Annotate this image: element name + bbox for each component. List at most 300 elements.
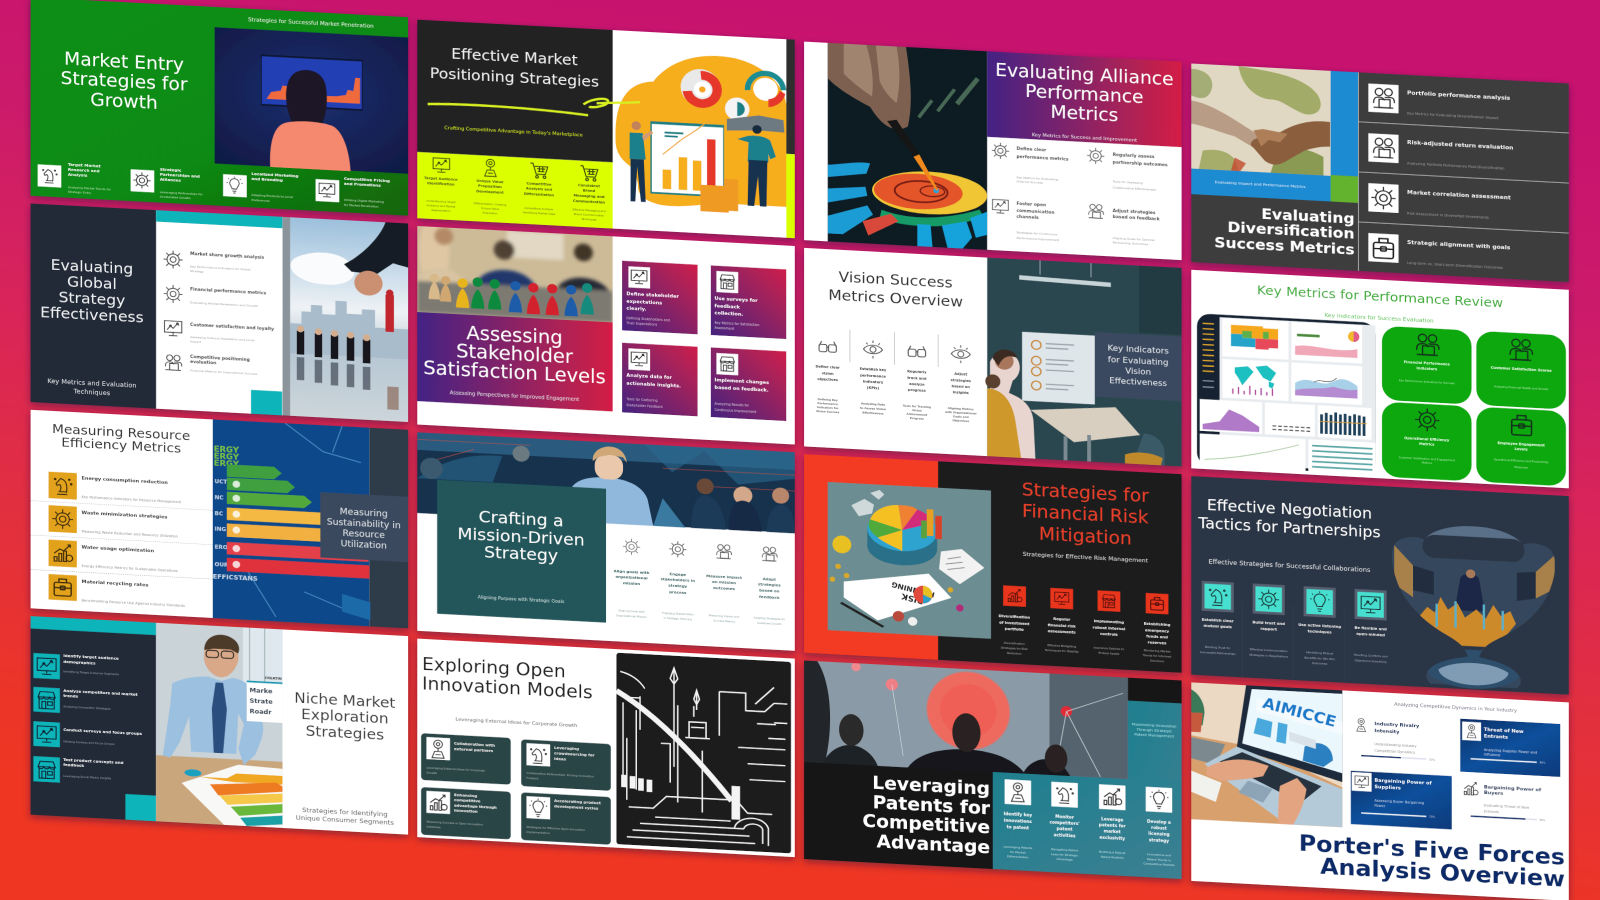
row: four mission items: on mission: [712, 579, 736, 585]
row: four risk actions: [999, 585, 1172, 663]
row: four items: Proposition: [482, 211, 498, 215]
panel: title block: Strategy: [484, 542, 558, 565]
card: financial performance indicators: Key Performance Indicators for Success: [1399, 378, 1455, 385]
card: bargaining power of suppliers: Bargaining Power of: [1374, 778, 1433, 787]
row: four steps: Goals and: [953, 414, 969, 419]
card: bargaining power of suppliers: Suppliers: [1374, 784, 1401, 792]
card: threat of new entrants: Influence: [1484, 752, 1500, 757]
row: four risk actions: Diversification: [1004, 641, 1025, 646]
row: four risk actions: Effective Budgeting: [1047, 643, 1076, 649]
slide: Market Entry Strategies for Growth: [31, 0, 408, 216]
card: use surveys: [711, 265, 786, 339]
subtitle: Key Metrics and Evaluation: [47, 377, 137, 390]
card: bargaining power of suppliers: Assessing Buyer Bargaining: [1374, 799, 1424, 805]
slide: Evaluating Global Strategy Effectiveness: [31, 204, 408, 422]
row: four strategies: Alliances: [160, 177, 181, 183]
card: analyze data: Analyze data for: [626, 373, 673, 381]
row: four negotiation tactics: Outcomes: [1312, 661, 1328, 666]
subtitle: Through Strategic: [1135, 727, 1172, 733]
row: four steps: Analyzing Data: [861, 402, 885, 407]
caption: Evaluating Impact and Performance Metrics: [1215, 180, 1306, 189]
row: four negotiation tactics: Identifying Mutual: [1306, 650, 1333, 656]
row: four steps: vision: [822, 371, 834, 376]
row: four patent actions: for Market: [1010, 850, 1026, 855]
row: four negotiation tactics: Benefits for Win-Win: [1304, 656, 1335, 661]
card: define expectations: expectations: [626, 299, 662, 307]
heading: slide title: Tactics for Partnerships: [1197, 515, 1381, 542]
row: four risk actions: Trends for Informed: [1142, 653, 1172, 659]
row: four patent actions: Competitive Markets: [1143, 862, 1175, 867]
row: four patent actions: Monitor: [1055, 814, 1075, 820]
row: four patent actions: Building a Robust: [1099, 850, 1126, 855]
list: four metrics: [164, 250, 274, 377]
list: four metrics: evaluation: [190, 359, 216, 366]
row: four items: Communication: [573, 199, 606, 204]
row: four steps: Performance: [817, 401, 838, 406]
heading: slide title: Vision Success: [839, 268, 953, 291]
row: four patent actions: Innovations and: [1147, 852, 1171, 857]
row: four items: Analysis and: [526, 187, 553, 192]
row: four patent actions: [1003, 779, 1175, 867]
card: use surveys: collection.: [715, 310, 743, 318]
photo: executives facing glowing network: [804, 660, 1128, 779]
card: accelerating product development: [521, 792, 611, 845]
row: four patent actions: Develop a: [1147, 819, 1171, 825]
row: four items: Development: [476, 189, 504, 195]
row: four risk actions: portfolio: [1005, 627, 1024, 632]
card: bargaining power of buyers: Evaluating Threat of New: [1484, 804, 1529, 810]
subtitle: Strategies for Identifying: [302, 806, 388, 818]
row: four strategies: Utilizing Digital Marketing: [344, 198, 384, 204]
row: four steps: Defining Key: [818, 397, 838, 402]
image: trophy-shaped cityscape photo: [1385, 518, 1564, 693]
card: employee engagement levels: Measures: [1514, 465, 1528, 469]
heading: slide title: Evaluating Alliance: [995, 60, 1174, 90]
photo: energy rating bars: UCT: [215, 479, 227, 486]
heading: slide title: Patents for: [873, 792, 990, 819]
row: four risk actions: Establishing: [1144, 622, 1171, 627]
list: four metrics with gold icons: Energy consumption reduction: [82, 476, 168, 486]
list: four metrics: Market share growth analysis: [190, 251, 265, 261]
list: four research steps: Identify target audience: [63, 653, 119, 661]
illustration: pie chart and risk planning paper: RISK: [900, 591, 924, 606]
photo: hand with pen on target: [828, 43, 987, 250]
photo: blurred team with colored pawns: [417, 215, 613, 323]
row: four strategies: Localized Marketing: [251, 171, 299, 178]
row: four steps: Effectiveness: [862, 410, 884, 415]
photo: hand placing figure: [283, 217, 408, 422]
slide: Measuring Resource Efficiency Metrics: [31, 410, 408, 628]
heading: slide title: Measuring Resource: [52, 422, 190, 444]
card: enhancing competitive advantage: competitive: [454, 797, 481, 803]
list: four metrics: Strategy: [190, 269, 204, 274]
heading: slide title: Assessing: [466, 322, 563, 349]
list: four metrics: Partnership Outcomes: [1113, 241, 1149, 247]
row: four items: Competitive Analysis:: [524, 206, 554, 211]
row: four risk actions: Decisions: [1150, 658, 1165, 663]
heading: slide title: Metrics Overview: [828, 286, 963, 310]
heading: slide title: Mitigation: [1039, 524, 1132, 549]
row: four steps: performance: [860, 373, 887, 379]
row: four risk actions: Insurance Options to: [1094, 646, 1124, 651]
card: threat of new entrants: [1460, 719, 1560, 777]
card: leveraging crowdsourcing: ideas: [554, 756, 567, 761]
heading: slide title: Metrics: [1050, 102, 1118, 126]
row: four strategies: for Market Penetration: [344, 203, 379, 208]
row: four steps: to Assess Vision: [860, 406, 886, 411]
card: accelerating product development: Strategies for Effective Open Innovation: [526, 825, 585, 832]
slide: Crafting a Mission-Driven Strategy: [417, 432, 795, 651]
row: four steps: Aligning Metrics: [948, 406, 974, 411]
subtitle: Crafting Competitive Advantage in Today's Marketplace: [444, 125, 583, 138]
row: four steps: insights: [953, 391, 969, 395]
row: four strategies: Adapting Products to Local: [251, 193, 293, 199]
illustration: hands on laptop: [1191, 682, 1342, 827]
row: four mission items: mission: [623, 580, 640, 586]
card: analyze data: Stakeholder Feedback: [626, 403, 663, 409]
photo: man pointing at roadmap: [156, 623, 283, 828]
card: use surveys: Key Metrics for Satisfaction: [715, 321, 759, 327]
card: implement changes: based on feedback.: [715, 385, 769, 393]
row: four negotiation tactics: Successful Partnerships: [1200, 650, 1236, 656]
card: implement changes: [711, 347, 786, 421]
heading: slide title: Key Metrics for Performance Review: [1257, 284, 1503, 311]
row: four steps: Achievement: [907, 412, 928, 417]
list: four metrics: Foster open: [1016, 201, 1046, 209]
slide: Evaluating Alliance Performance Metrics: [804, 42, 1182, 260]
panel: key indicators caption: [1095, 332, 1182, 401]
heading: slide title: Evaluating: [1261, 205, 1355, 228]
list: four metrics: [992, 142, 1168, 248]
card: analyze data: Tools for Gathering: [625, 397, 658, 403]
panel: key indicators caption: for Evaluating: [1108, 354, 1169, 367]
row: four items: [424, 156, 606, 222]
row: four items: Audience and Market: [426, 203, 455, 209]
row: four steps: (KPIs): [867, 386, 879, 390]
card: industry rivalry intensity: [1357, 718, 1436, 762]
list: four metrics: Evaluating Market Penetration and Growth: [190, 301, 258, 308]
slide: Strategies for Financial Risk Mitigation: [804, 454, 1182, 673]
list: four metrics: Key Performance Indicators for Global: [190, 265, 251, 272]
list: four metrics with gold icons: Measuring Waste Reduction and Resource Utilization: [82, 530, 178, 539]
list: four metrics: Risk Assessment in Diversified Investments: [1407, 211, 1489, 220]
row: four patent actions: licensing: [1148, 831, 1170, 837]
row: four negotiation tactics: rapport: [1260, 627, 1277, 632]
list: four metrics: channels: [1016, 214, 1039, 221]
row: four items: Techniques: [581, 217, 597, 222]
row: four steps: with Organizational: [945, 410, 976, 415]
row: four mission items: feedback: [759, 594, 780, 600]
row: four risk actions: Regular: [1053, 617, 1070, 622]
row: four risk actions: of investment: [999, 620, 1030, 626]
illustration: pie chart and risk planning paper: PLANNING: [891, 580, 936, 599]
card: industry rivalry intensity: 50%: [1429, 757, 1436, 762]
heading: slide title: Competitive: [862, 811, 990, 838]
card: bargaining power of buyers: 85%: [1540, 818, 1546, 822]
row: four steps: [816, 328, 976, 423]
list: four research steps: Test product concepts and: [63, 757, 124, 765]
heading: slide title: Success Metrics: [1214, 234, 1355, 259]
row: four mission items: based on: [759, 588, 780, 594]
list: four research steps: feedback: [63, 762, 85, 768]
card: industry rivalry intensity: Competition Dynamics: [1374, 749, 1415, 755]
list: four metrics: Financial Metrics for International Success: [190, 369, 258, 376]
photo: woman viewing chart screen: [215, 27, 408, 174]
slide: Effective Market Positioning Strategies: [417, 20, 795, 238]
card: enhancing competitive advantage: advantage through: [454, 803, 497, 810]
card: define expectations: Defining Stakeholders and: [626, 316, 670, 322]
card: financial performance indicators: [1382, 326, 1472, 405]
card: bargaining power of suppliers: Power: [1374, 804, 1386, 808]
heading: slide title: Evaluating: [51, 256, 133, 278]
heading: slide title: Financial Risk: [1022, 501, 1149, 528]
row: four items: Unique Value: [481, 206, 499, 211]
row: four items: Target Audience: [424, 176, 458, 182]
card: customer satisfaction scores: Customer Satisfaction Scores: [1491, 366, 1552, 373]
list: four metrics: Key Metrics for Evaluating: [1016, 175, 1058, 181]
row: four patent actions: patent: [1057, 826, 1073, 832]
card: define expectations: clearly.: [626, 306, 647, 312]
heading: slide title: Exploring Open: [422, 654, 566, 682]
row: four risk actions: emergency: [1145, 628, 1170, 633]
row: four steps: Objectives: [952, 418, 970, 423]
slide: Leveraging Patents for Competitive Advantage: [804, 660, 1182, 879]
subtitle: Strategies for Successful Market Penetration: [248, 17, 374, 30]
row: four mission items: Adapt: [763, 576, 776, 582]
row: four mission items: Organizational Mission: [616, 613, 647, 619]
card: collaboration with external partners: Collaboration with: [454, 741, 495, 748]
row: four patent actions: innovations: [1004, 818, 1032, 824]
row: four negotiation tactics: Objections Gracefully: [1355, 658, 1387, 664]
list: four metrics: Adjust strategies: [1113, 208, 1156, 216]
row: four negotiation tactics: open-minded: [1356, 632, 1385, 637]
row: four patent actions: robust: [1151, 825, 1167, 831]
card: operational efficiency metrics: [1382, 402, 1472, 481]
card: use surveys: Assessment: [715, 326, 735, 331]
card: implement changes: Continuous Improvement: [715, 408, 757, 414]
slide: Porter's Five Forces Analysis Overview: [1191, 682, 1569, 900]
row: four patent actions: Advantage: [1056, 857, 1073, 862]
card: accelerating product development: Implementation: [526, 830, 550, 835]
panel: sustainability caption: Sustainability in: [327, 518, 401, 531]
heading: slide title: Analysis Overview: [1320, 854, 1565, 892]
heading: slide title: Effective Market: [451, 45, 578, 69]
card: industry rivalry intensity: Intensity: [1374, 728, 1400, 736]
row: four steps: Tools for Tracking: [903, 404, 931, 409]
row: four strategies: and Branding: [251, 176, 283, 183]
list: four metrics with gold icons: Energy Efficiency Metrics for Sustainable Operations: [82, 564, 178, 573]
card: leveraging crowdsourcing: [521, 739, 611, 791]
row: four risk actions: Strategies for Risk: [1001, 646, 1028, 651]
row: four patent actions: market: [1104, 829, 1121, 834]
subtitle: Patent Management: [1134, 731, 1175, 738]
heading: slide title: Efficiency Metrics: [61, 436, 181, 456]
row: four negotiation tactics: [1200, 581, 1388, 685]
list: four metrics: Aligning Goals for Optimal: [1113, 236, 1155, 242]
list: four research steps: Identifying Target Audience Segments: [63, 670, 119, 676]
row: four patent actions: Laws for Strategic: [1051, 852, 1079, 857]
list: four metrics: Strategies for Continuous: [1016, 230, 1058, 236]
row: four items: Differentiation: Creating: [473, 202, 507, 207]
row: four strategies: Research and: [68, 167, 100, 173]
card: operational efficiency metrics: Operational Efficiency: [1404, 436, 1450, 442]
list: four metrics: communication: [1016, 208, 1055, 216]
list: four metrics: Market correlation assessment: [1407, 190, 1511, 201]
card: collaboration with external partners: Growth: [426, 771, 437, 775]
row: four strategies: Competitive Pricing: [344, 176, 390, 183]
card: enhancing competitive advantage: Enhancing: [454, 792, 477, 798]
card: bargaining power of suppliers: 70%: [1429, 815, 1436, 819]
row: four patent actions: competitors': [1050, 820, 1080, 826]
row: four strategies: Analysis: [68, 172, 88, 178]
slide: Niche Market Exploration Strategies: [31, 616, 408, 835]
slide: Assessing Stakeholder Satisfaction Levels: [417, 215, 795, 444]
subtitle: Key Metrics for Success and Improvement: [1032, 132, 1137, 144]
row: four patent actions: exclusivity: [1099, 835, 1125, 841]
photo: man pointing at roadmap: CREATIN: [265, 676, 282, 681]
card: employee engagement levels: Operational Efficiency and Productivity: [1494, 458, 1549, 464]
list: four metrics with gold icons: Material recycling rates: [82, 579, 149, 588]
list: four metrics with gold icons: Waste minimization strategies: [82, 510, 168, 520]
row: four risk actions: Monitoring Market: [1144, 648, 1171, 654]
list: four research steps: demographics: [63, 659, 96, 666]
row: four items: Consistent: [578, 183, 600, 188]
row: four strategies: Accelerated Growth: [160, 195, 191, 200]
row: four risk actions: Diversification: [999, 614, 1030, 620]
row: four patent actions: activities: [1054, 832, 1076, 838]
card: use surveys: feedback: [715, 304, 741, 311]
list: four research steps: Analyzing Competitor Strategies: [63, 704, 111, 711]
row: four strategies: Strategic Entry: [68, 190, 91, 195]
row: four patent actions: Leverage: [1101, 816, 1123, 822]
photo: meeting room: [985, 258, 1182, 466]
row: four negotiation tactics: Use active listening: [1298, 623, 1341, 629]
row: four strategies: Strategic: [160, 167, 182, 173]
heading: slide title: Leveraging: [872, 773, 990, 800]
row: four items: Identifying Market Gaps: [523, 210, 556, 216]
image: white line-art building on black: [616, 653, 791, 853]
panel: key indicators caption: Effectiveness: [1109, 375, 1167, 388]
row: four items: Competitive: [527, 181, 552, 187]
row: four patent actions: Patent Portfolio: [1101, 855, 1124, 860]
heading: slide title: Strategies: [306, 722, 384, 744]
card: leveraging crowdsourcing: Collaborative Partnerships: Driving Innovation: [526, 771, 594, 779]
row: four strategies: Leveraging Partnerships for: [160, 190, 203, 196]
photo: energy rating bars: ERO: [215, 544, 228, 551]
list: four metrics: Long-term vs. Short-term Diversification Outcomes: [1407, 261, 1503, 270]
list: four metrics: Define clear: [1016, 146, 1047, 153]
row: four patent actions: Leveraging Patents: [1003, 845, 1033, 850]
row: four patent actions: Navigating Patent: [1051, 847, 1079, 852]
heading: slide title: Global: [67, 273, 117, 293]
card: accelerating product development: development cycles: [554, 803, 599, 811]
list: four metrics: Collaborative Effectiveness: [1113, 186, 1157, 192]
panel: sustainability caption: Utilization: [341, 539, 387, 552]
subtitle: Assessing Perspectives for Improved Engagement: [450, 391, 579, 403]
card: leveraging crowdsourcing: Forward: [526, 776, 538, 781]
row: four steps: Regularly: [907, 370, 927, 374]
card: employee engagement levels: Levels: [1515, 447, 1528, 452]
card: collaboration with external partners: Leveraging External Ideas for Corporate: [426, 766, 485, 773]
row: four steps: Indicators for: [817, 405, 839, 410]
photo: energy rating bars: EFFICSTANS: [213, 572, 258, 583]
photo: energy rating bars: OURCE: [215, 562, 237, 569]
card: operational efficiency metrics: Customer Satisfaction and Engagement: [1399, 455, 1455, 462]
illustration: team with chart: [615, 51, 786, 216]
list: four metrics: partnership outcomes: [1113, 160, 1168, 168]
panel: sustainability caption: Measuring: [340, 508, 388, 520]
row: four mission items: Sustained Growth: [757, 621, 782, 626]
row: four mission items: Engage: [670, 571, 686, 577]
row: four steps: Define clear: [816, 365, 840, 370]
panel: title block: Aligning Purpose with Strategic Goals: [478, 594, 565, 605]
row: four patent actions: Identify key: [1004, 811, 1032, 817]
photo: energy rating bars: BC: [215, 511, 223, 517]
photo: handshake over world map: [1191, 64, 1331, 176]
card: enhancing competitive advantage: innovation: [454, 808, 478, 814]
list: four research steps: Leveraging Social Media Insights: [63, 774, 112, 780]
row: four mission items: Measure impact: [706, 573, 742, 580]
list: four research steps: Conduct surveys and focus groups: [63, 727, 143, 736]
subtitle: Effective Strategies for Successful Collaborations: [1209, 558, 1371, 574]
panel: title block: Crafting a: [479, 507, 564, 530]
row: four risk actions: funds and: [1146, 634, 1168, 639]
row: four items: Differentiation: [524, 192, 555, 197]
row: four mission items: strategies: [758, 581, 781, 588]
slide: Effective Negotiation Tactics for Partnerships: [1191, 476, 1569, 695]
card: bargaining power of suppliers: [1351, 771, 1452, 829]
card: threat of new entrants: Entrants: [1484, 734, 1508, 741]
list: four metrics: Performance Improvement: [1016, 236, 1060, 242]
card: financial performance indicators: Financial Performance: [1404, 360, 1451, 367]
subtitle: Strategies for Effective Risk Management: [1023, 552, 1149, 564]
list: four metrics: Key Metrics for Evaluating Diversification Impact: [1407, 112, 1499, 120]
heading: slide title: Diversification: [1228, 219, 1355, 243]
row: four items: Brand: [583, 189, 596, 193]
list: four metrics: Assessing Cultural Adaptation and Local: [190, 335, 254, 342]
row: four items: Messaging and: [574, 194, 605, 199]
row: four negotiation tactics: mutual goals: [1204, 624, 1233, 629]
dashboard image: [1197, 313, 1375, 475]
list: four research steps: Analyze competitors and market: [63, 688, 138, 697]
card: enhancing competitive advantage: Measuring Success in Open Innovation: [426, 820, 483, 827]
heading: slide title: Innovation Models: [422, 674, 593, 703]
card: customer satisfaction scores: [1476, 331, 1566, 410]
row: four steps: track and: [907, 376, 927, 381]
panel: key indicators caption: Vision: [1125, 366, 1151, 377]
list: four metrics: Analyzing Portfolio Performance Post-Diversification: [1407, 162, 1504, 171]
list: four metrics: Financial performance metrics: [190, 287, 267, 296]
row: four steps: analyze: [909, 382, 925, 387]
heading: slide title: Market Entry: [64, 49, 184, 75]
heading: slide title: Strategies for: [61, 68, 188, 96]
row: four patent actions: strategy: [1149, 837, 1169, 843]
heading: slide title: Stakeholder: [456, 340, 573, 368]
list: four metrics with gold icons: Water usage optimization: [82, 544, 155, 554]
list: four research steps: trends: [63, 693, 79, 699]
row: four negotiation tactics: Handling Conflicts and: [1354, 653, 1388, 659]
row: four risk actions: Protect Assets: [1099, 651, 1120, 656]
list: four metrics: Regularly assess: [1113, 152, 1155, 160]
row: four negotiation tactics: Build trust and: [1252, 620, 1285, 626]
card: define expectations: Their Expectations: [625, 321, 657, 327]
heading: slide title: Strategy: [59, 289, 125, 309]
panel: title block: Mission-Driven: [458, 524, 585, 550]
row: four items: Brand Communication: [574, 212, 605, 218]
card: industry rivalry intensity: Understanding Industry: [1374, 742, 1417, 748]
row: four steps: based on: [952, 384, 970, 389]
heading: slide title: Exploration: [301, 706, 389, 728]
